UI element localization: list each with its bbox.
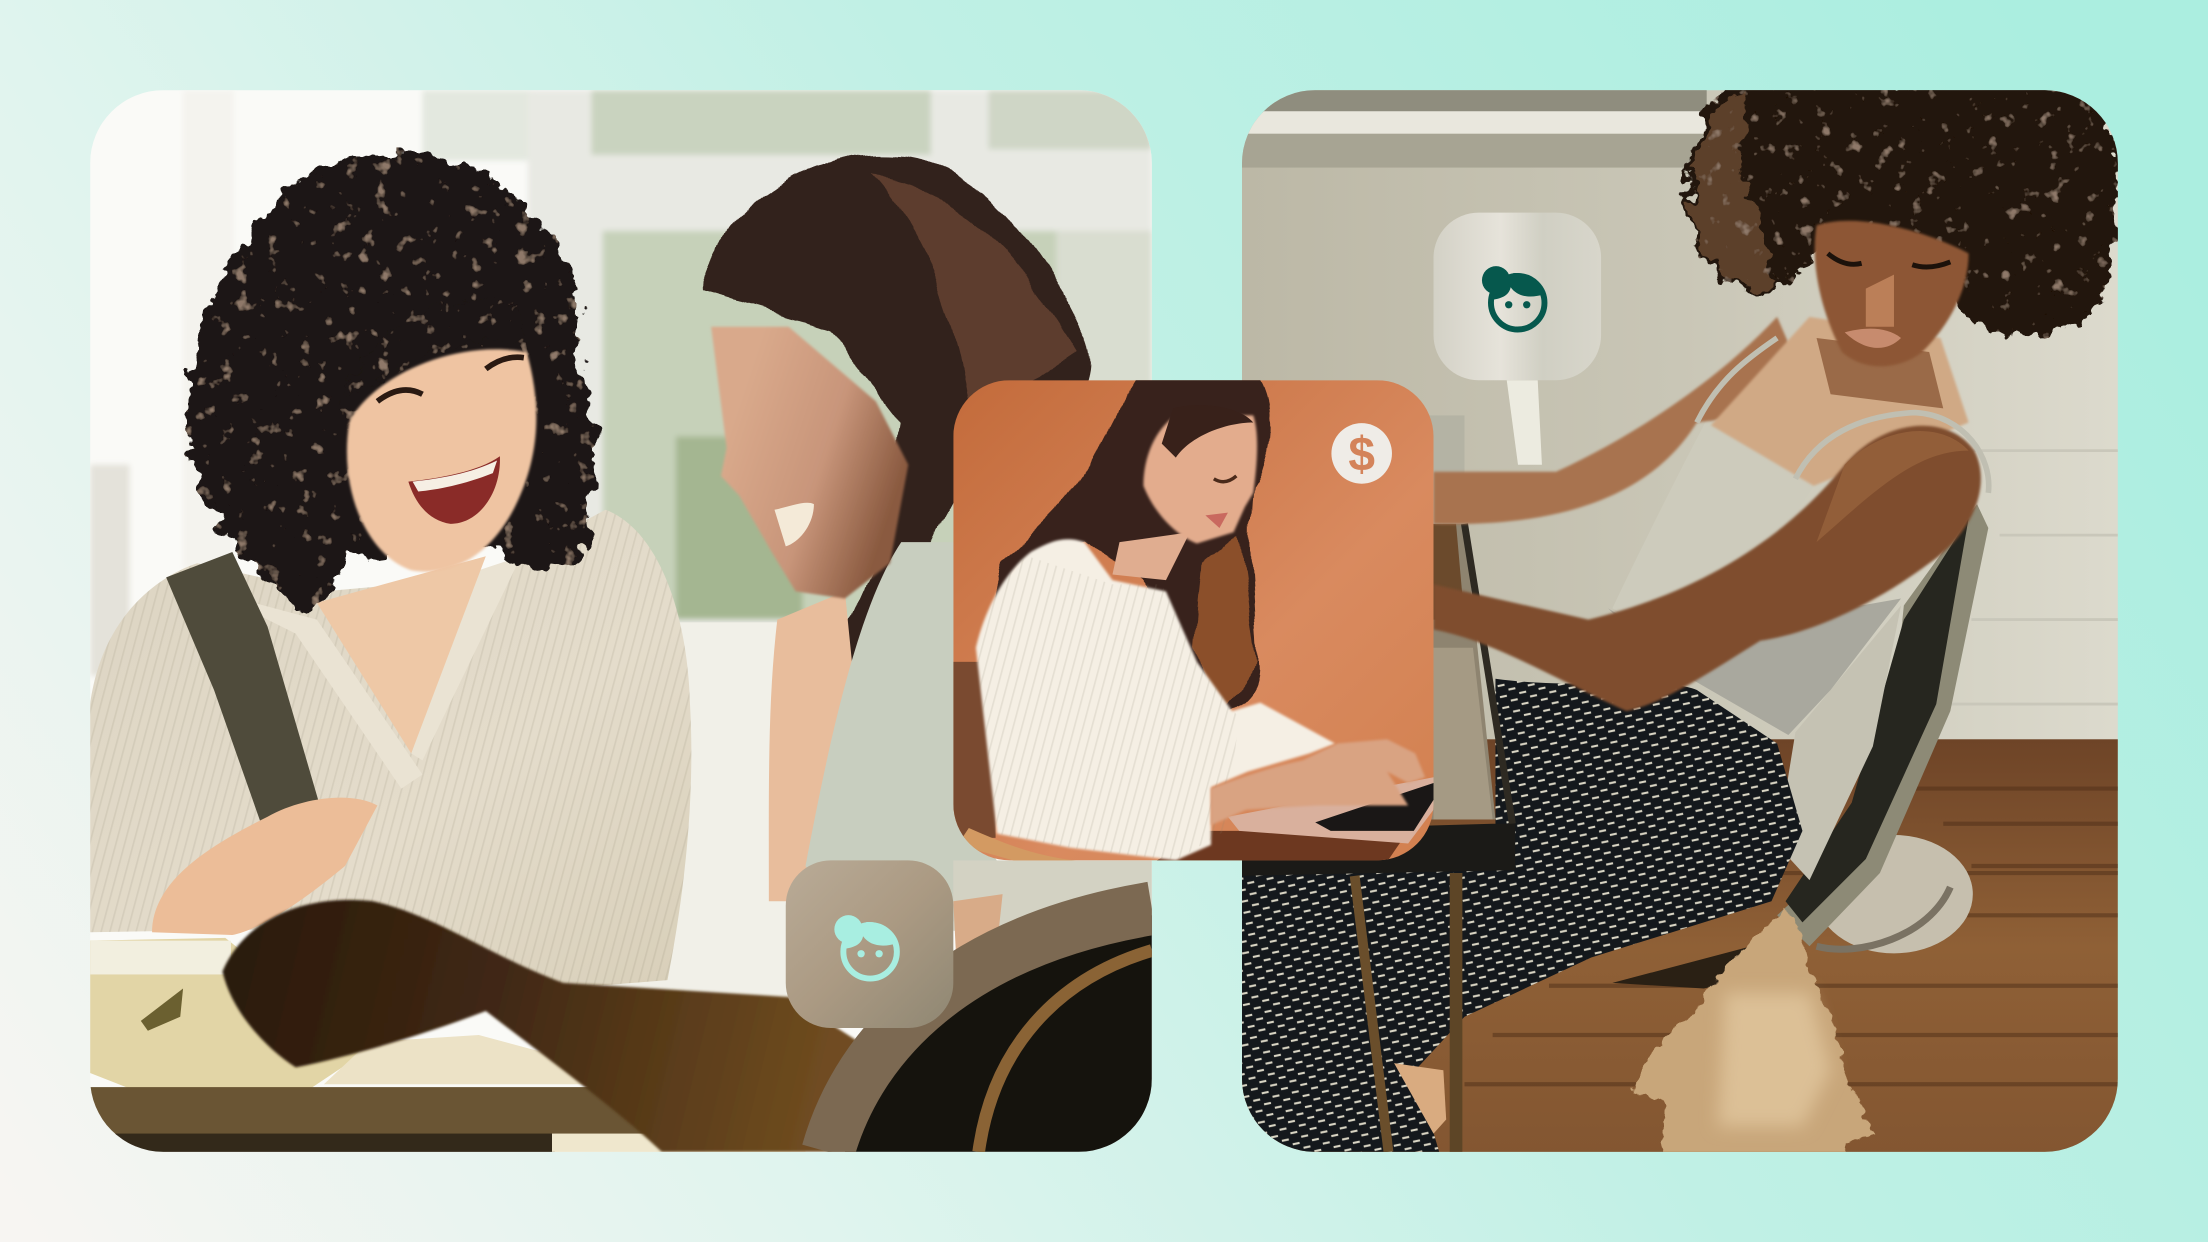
- woman one hair: [189, 151, 595, 620]
- laptop: [1228, 777, 1434, 843]
- woman one eyes: [377, 357, 524, 401]
- woman one hand: [152, 798, 377, 935]
- woman one overall strap: [166, 552, 321, 842]
- icon: dark green face: [1482, 266, 1544, 330]
- dog: [1631, 908, 1873, 1162]
- wicker chair: [953, 662, 996, 838]
- pants: [1155, 831, 1408, 862]
- chair base: [1815, 835, 1973, 953]
- pants: [1242, 679, 1802, 1152]
- panel: woman at desk photo: [1242, 82, 2118, 1162]
- strap: [1697, 338, 1989, 493]
- wooden floor: [1242, 739, 2118, 1155]
- woman one face: [347, 349, 536, 572]
- icon tile: woman face on left photo: [786, 860, 953, 1028]
- sweater collar: [257, 561, 516, 788]
- icon: dollar badge: $: [1348, 428, 1375, 481]
- near arm: [1434, 426, 1981, 711]
- face: [1143, 415, 1257, 544]
- woman one sweater: [90, 510, 691, 989]
- face: [1815, 221, 1969, 366]
- far arm: [1434, 317, 1817, 524]
- neck and chest: [1711, 317, 1969, 486]
- icon: dollar badge: [1331, 423, 1392, 484]
- woman one bangs: [378, 346, 462, 386]
- woman one mouth: [408, 456, 500, 524]
- woman two raised arm: [769, 591, 852, 901]
- arm and hands: [1211, 739, 1425, 825]
- woman one chest: [317, 556, 486, 753]
- icon tile: woman face on right photo: [1434, 213, 1601, 380]
- desk legs: [1355, 876, 1388, 1152]
- woman two face: [711, 327, 908, 598]
- afro hair: [1688, 82, 2118, 336]
- icon: mint face: [834, 915, 897, 979]
- chair arc: [828, 908, 1152, 1152]
- chair back: [1777, 504, 1988, 946]
- panel: woman with laptop photo: [953, 377, 1434, 880]
- hair: [993, 377, 1271, 718]
- neck: [1112, 532, 1190, 580]
- woman two dark arm: [222, 900, 859, 1152]
- chair dark backdrop: [845, 915, 1152, 1152]
- book: [90, 938, 360, 1088]
- woman two hair back: [702, 154, 1092, 662]
- foot: [1394, 1063, 1446, 1134]
- gray tank hem: [1608, 598, 1901, 735]
- table: [324, 1035, 582, 1084]
- camisole: [1613, 584, 1624, 610]
- panel: two women laughing photo: [90, 90, 1152, 1153]
- desk: [1430, 416, 1464, 472]
- woman two tee: [806, 542, 997, 921]
- sweater: [976, 539, 1335, 860]
